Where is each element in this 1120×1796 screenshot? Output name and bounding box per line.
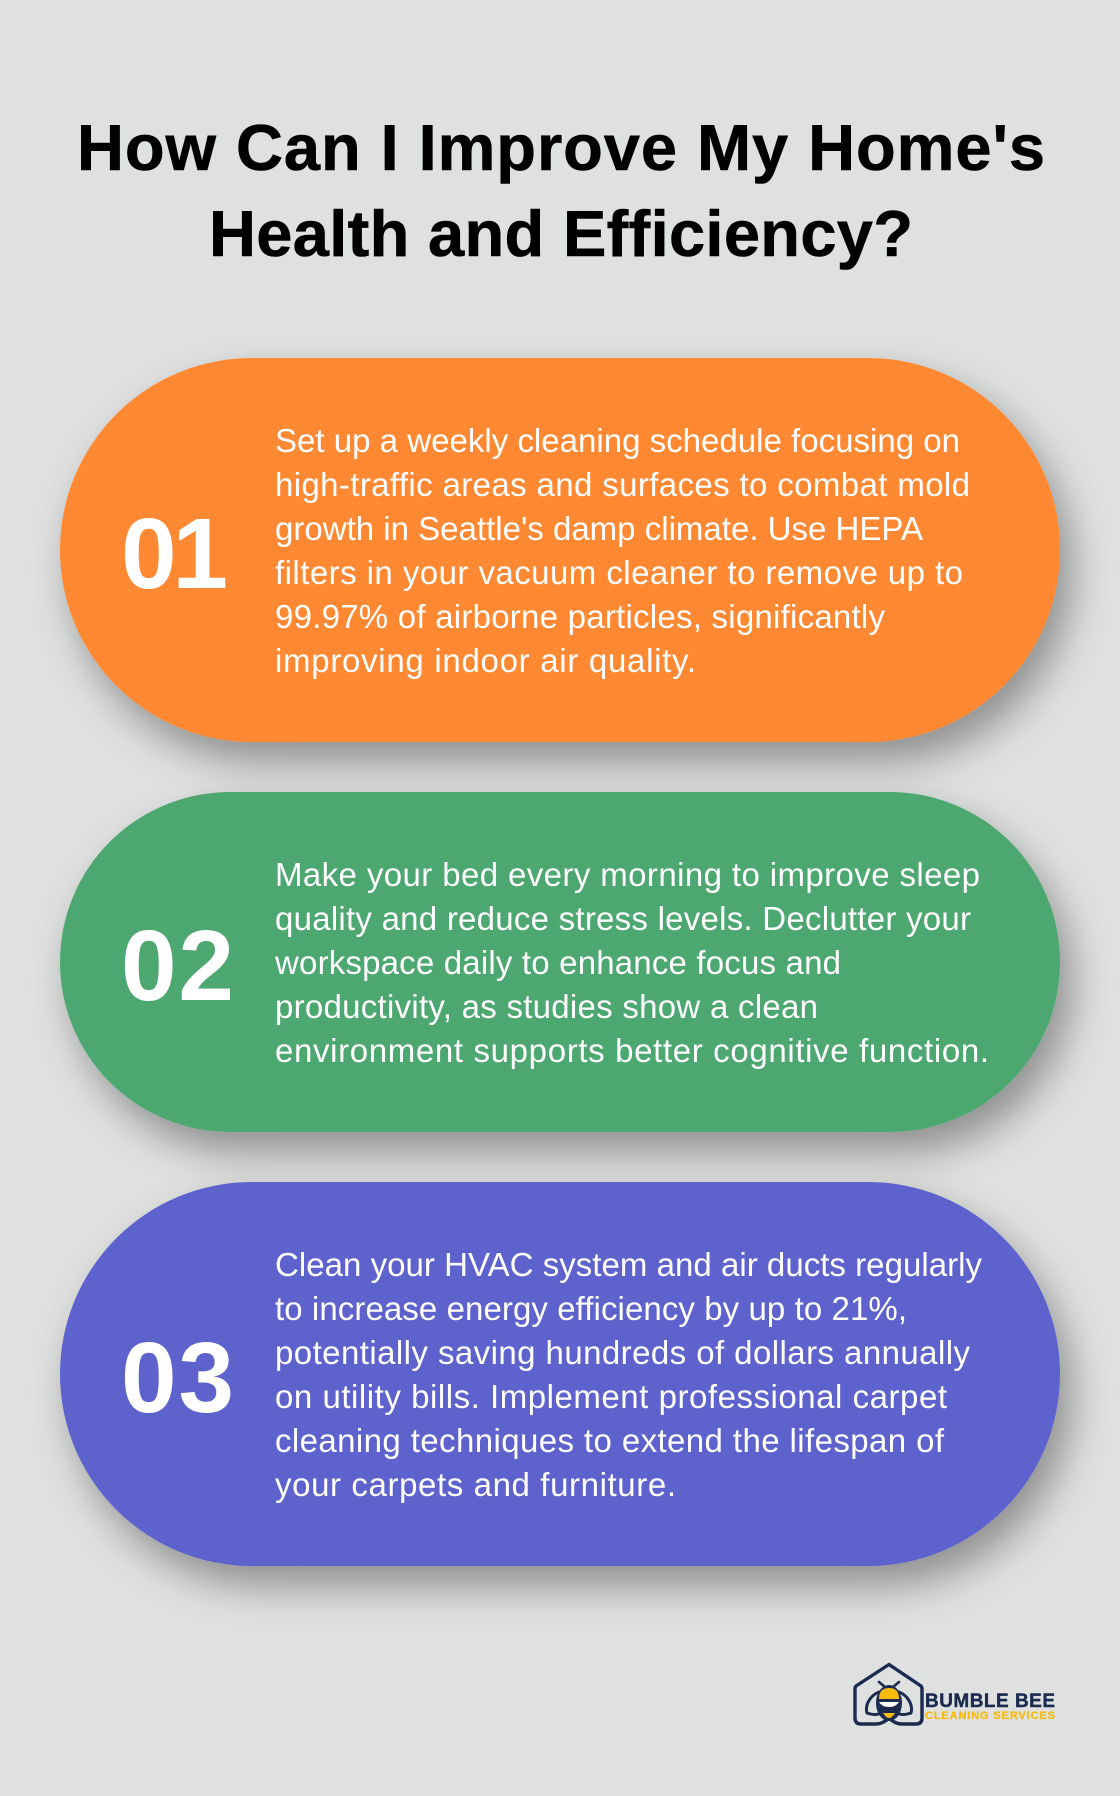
card: green pill [60, 792, 1060, 1132]
number 03: 03 [121, 1322, 234, 1434]
text block: step 01: improving indoor air quality. [275, 642, 696, 679]
title: Health and Efficiency? [209, 197, 913, 270]
card: orange pill [60, 358, 1060, 742]
number 01: 01 [121, 498, 228, 610]
text block: step 03 [275, 1246, 982, 1503]
text block: step 01: filters in your vacuum cleaner to remove up to [275, 554, 963, 591]
number 02: 02 [121, 910, 234, 1022]
text block: step 03: cleaning techniques to extend the lifespan of [275, 1422, 945, 1459]
panel: step 01 [60, 358, 1060, 742]
text block: step 02: Make your bed every morning to improve sleep [275, 856, 980, 893]
panel: step 03 [60, 1182, 1060, 1566]
text block: step 02 [274, 856, 989, 1069]
card: purple pill [60, 1182, 1060, 1566]
wordmark: BUMBLE BEE [925, 1691, 1055, 1712]
text block: step 01 [275, 422, 970, 679]
text block: step 03: your carpets and furniture. [275, 1466, 676, 1503]
icon: bee in house [855, 1664, 922, 1724]
text block: step 01: high-traffic areas and surfaces to combat mold [275, 466, 970, 503]
text block: step 03: potentially saving hundreds of dollars annually [275, 1334, 970, 1371]
text block: step 02: productivity, as studies show a clean [275, 988, 818, 1025]
panel: step 02 [60, 792, 1060, 1132]
text block: step 03: Clean your HVAC system and air ducts regularly [275, 1246, 982, 1283]
text block: step 03: on utility bills. Implement professional carpet [275, 1378, 947, 1415]
text block: step 02: quality and reduce stress levels. Declutter your [275, 900, 971, 937]
text block: step 03: to increase energy efficiency by up to 21%, [275, 1290, 907, 1327]
logo: Bumble Bee Cleaning Services [855, 1664, 1055, 1724]
text block: step 01: 99.97% of airborne particles, significantly [275, 598, 886, 635]
text block: step 02: workspace daily to enhance focus and [274, 944, 841, 981]
text block: step 01: growth in Seattle's damp climate. Use HEPA [275, 510, 923, 547]
text block: step 01: Set up a weekly cleaning schedule focusing on [275, 422, 960, 459]
tagline: CLEANING SERVICES [925, 1710, 1055, 1722]
title: How Can I Improve My Home's [77, 111, 1045, 184]
text block: step 02: environment supports better cognitive function. [275, 1032, 989, 1069]
title [77, 111, 1045, 270]
